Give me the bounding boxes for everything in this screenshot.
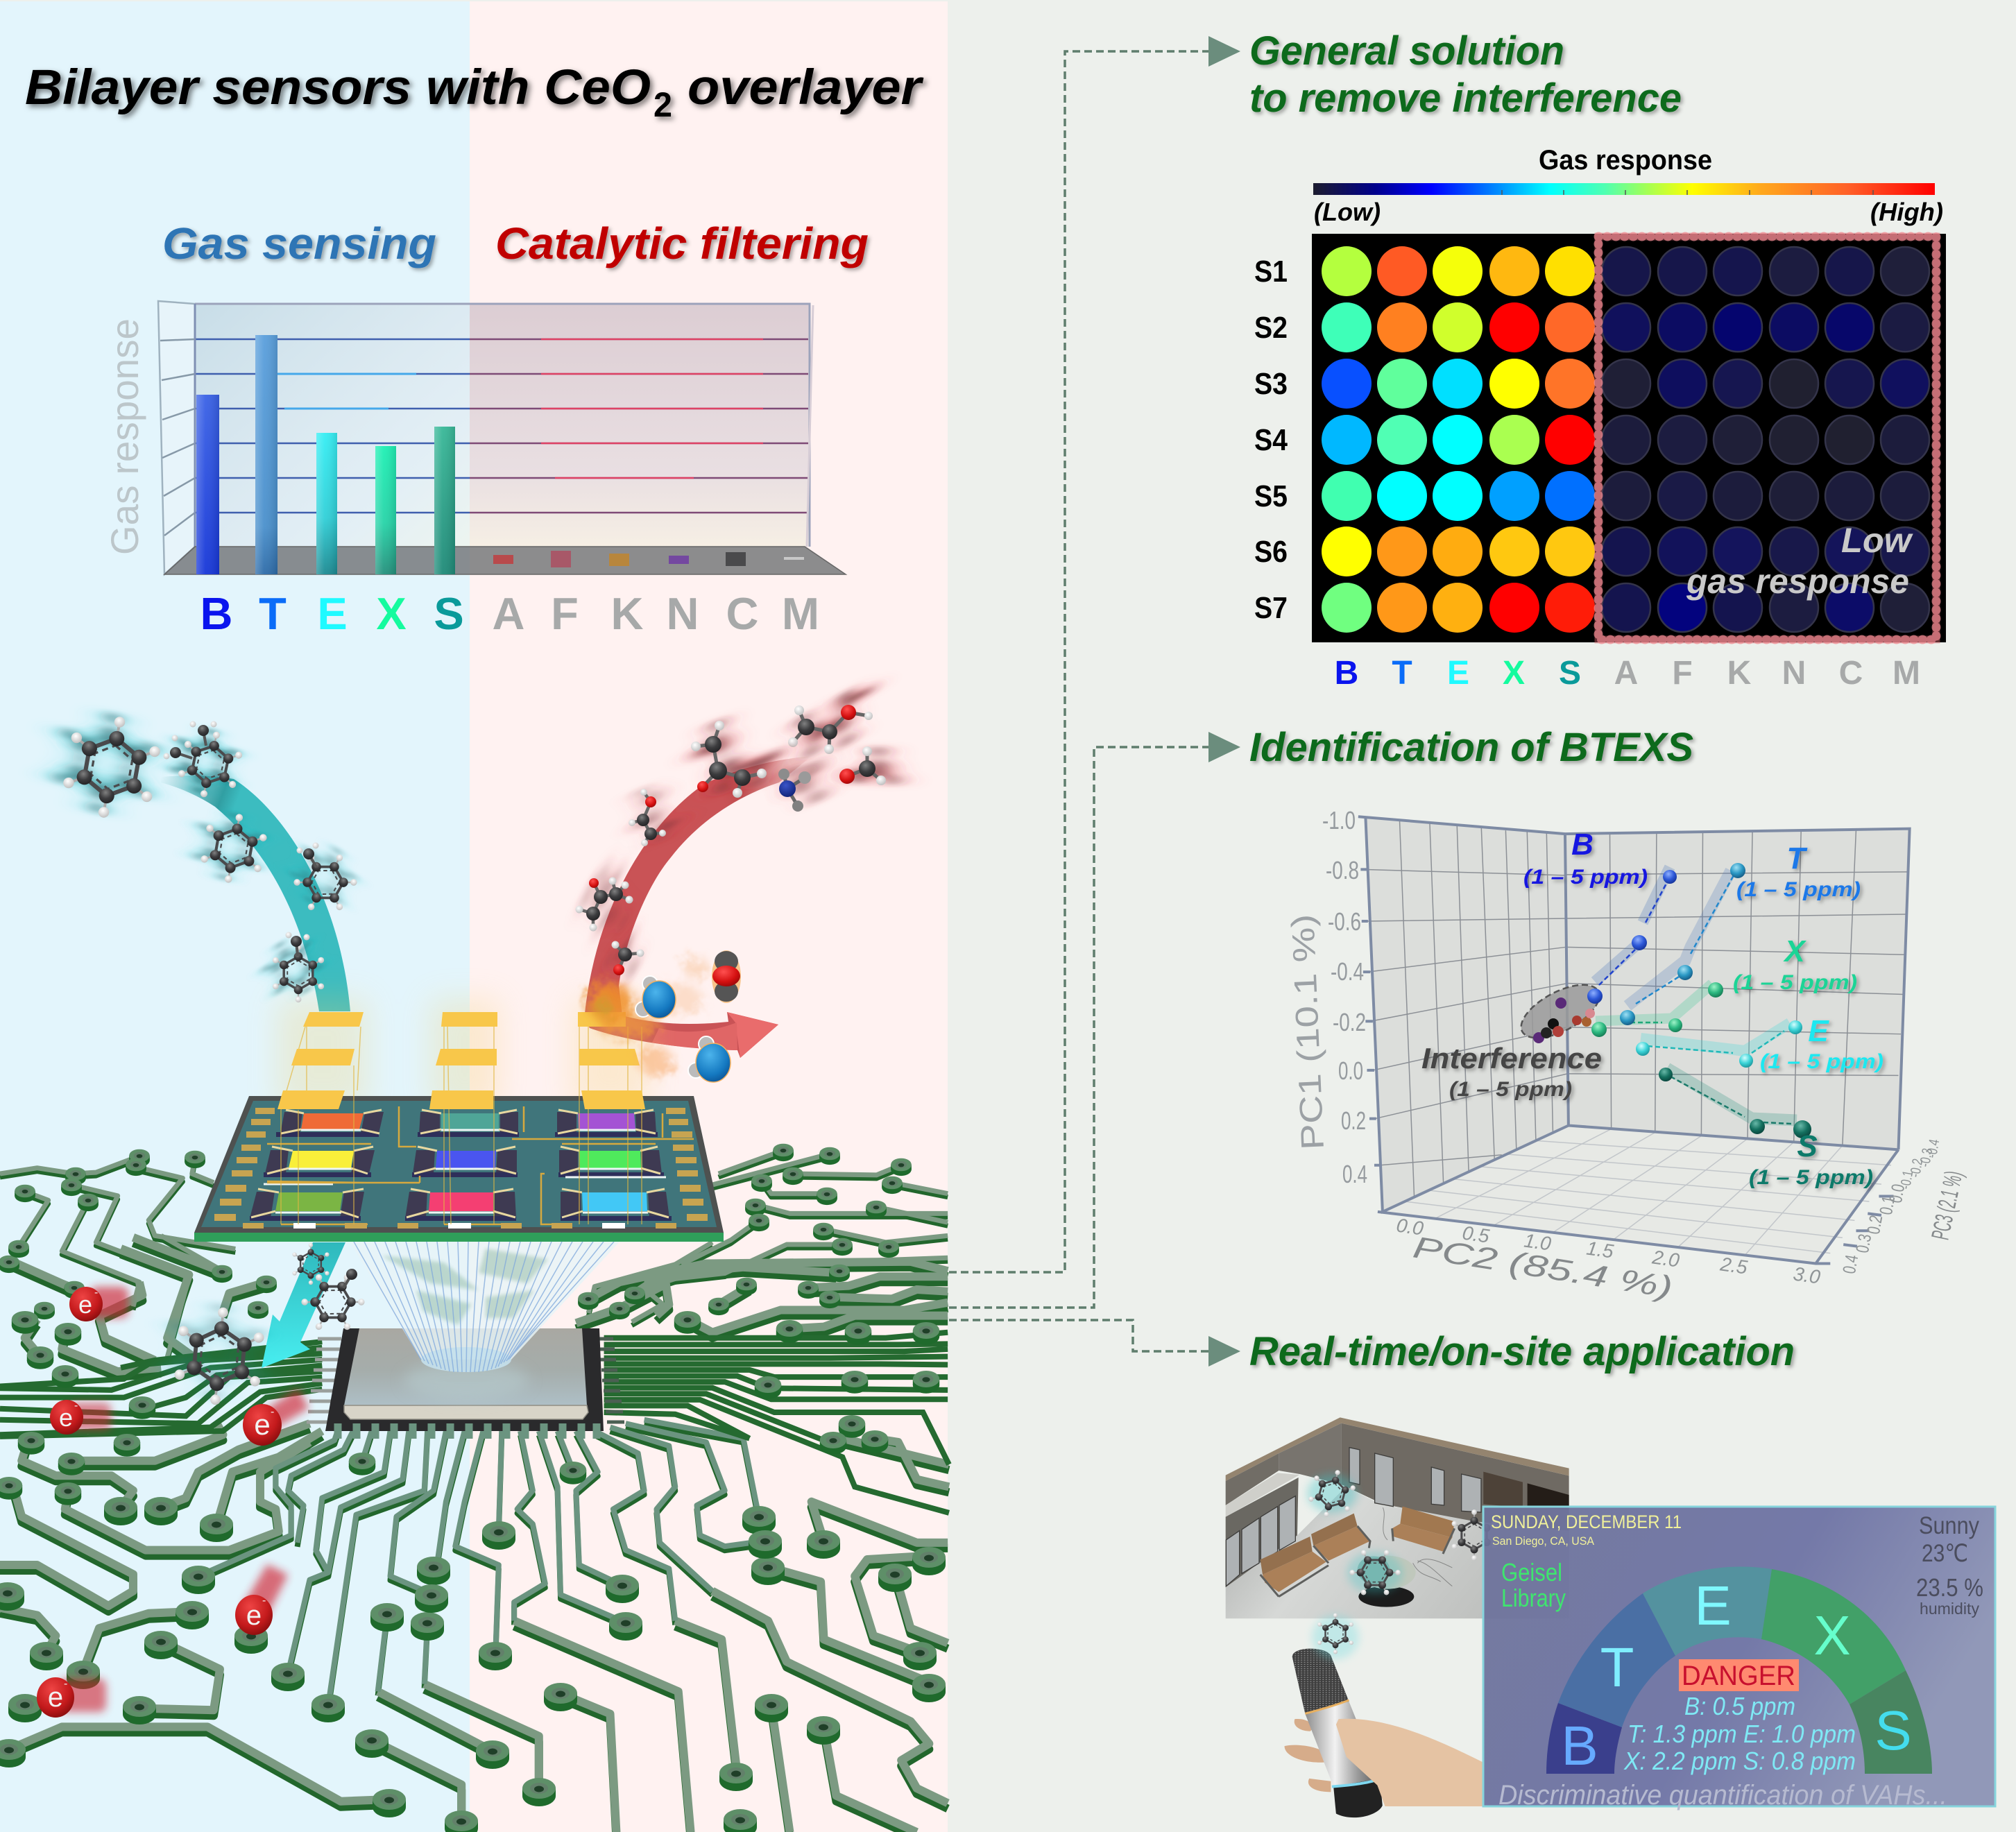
bar S bbox=[434, 427, 455, 574]
location text: Geisel bbox=[1501, 1558, 1562, 1586]
gauge letters: B bbox=[1561, 1715, 1598, 1777]
icon: benzene in room 1 bbox=[1305, 1464, 1359, 1523]
row labels: S2 bbox=[1254, 311, 1288, 345]
callout: low gas response bbox=[1686, 521, 1913, 601]
label B: B bbox=[1571, 828, 1594, 862]
label E bbox=[1760, 1014, 1883, 1073]
arrow: teal gas flow in bbox=[161, 776, 350, 1011]
legend low and high: (High) bbox=[1870, 198, 1943, 226]
label X bbox=[1733, 934, 1857, 994]
PC3 tick labels: 0.0 bbox=[1885, 1183, 1908, 1204]
legend low and high: (Low) bbox=[1314, 198, 1381, 226]
icon: water molecule 1 bbox=[635, 976, 676, 1018]
heading: gas sensing: Gas sensing bbox=[162, 219, 436, 268]
icon: electron 1: e bbox=[78, 1290, 92, 1319]
interference cluster bbox=[1513, 974, 1607, 1049]
signal buses bbox=[0, 1333, 949, 1513]
axis letters: F bbox=[551, 588, 579, 639]
plot walls and grid bbox=[1358, 816, 1910, 1264]
row labels: S6 bbox=[1254, 535, 1288, 569]
PC3 tick labels: 0.4 bbox=[1838, 1253, 1862, 1275]
label E: E bbox=[1808, 1014, 1829, 1048]
gauge letters: E bbox=[1694, 1575, 1732, 1636]
weather text: 23℃ bbox=[1922, 1540, 1968, 1567]
trajectory: T bbox=[1628, 871, 1734, 1006]
icon: molecule after sensor 1 bbox=[292, 1243, 330, 1285]
PC3 tick labels: 0.3 bbox=[1852, 1233, 1875, 1254]
trajectory: E bbox=[1641, 1023, 1790, 1053]
bar B bbox=[196, 395, 219, 574]
axis letters: A bbox=[493, 588, 524, 639]
PC2 tick labels bbox=[1395, 1215, 1822, 1288]
axis letters: C bbox=[726, 588, 758, 639]
combustion flames bbox=[587, 957, 708, 1077]
heatmap panel bbox=[1312, 234, 1946, 642]
column letters: M bbox=[1893, 655, 1920, 692]
PC2 tick labels: 1.0 bbox=[1523, 1230, 1553, 1255]
label S bbox=[1749, 1129, 1873, 1189]
smoke bbox=[1383, 1507, 1452, 1586]
heading: general solution: General solution bbox=[1249, 28, 1564, 74]
callout: low gas response: Low bbox=[1841, 521, 1913, 560]
location text bbox=[1501, 1558, 1566, 1612]
title: Bilayer sensors with CeO bbox=[25, 60, 651, 115]
label S: (1 – 5 ppm) bbox=[1749, 1166, 1873, 1189]
icon: electron 3: - bbox=[271, 1406, 274, 1418]
icon: toluene 2 bbox=[256, 930, 330, 1006]
bar X bbox=[375, 446, 396, 574]
arrow: red interfering gas flow bbox=[585, 756, 812, 1058]
icon: electron 4: - bbox=[262, 1595, 266, 1607]
label T: (1 – 5 ppm) bbox=[1736, 878, 1861, 901]
icon: small formaldehyde bbox=[604, 932, 650, 977]
title bbox=[25, 60, 924, 124]
axis letters bbox=[200, 588, 819, 639]
axis label: gas response: Gas response bbox=[103, 318, 146, 555]
icon: electron 4: e bbox=[246, 1600, 262, 1631]
column letters: A bbox=[1614, 655, 1638, 692]
sensor array chip bbox=[194, 1096, 724, 1242]
PC3 axis title: PC3 (2.1 %) bbox=[1926, 1168, 1968, 1242]
edge contact pads bbox=[214, 1108, 708, 1229]
electrons bbox=[37, 1287, 309, 1718]
sofas bbox=[1261, 1507, 1455, 1597]
column letters: T bbox=[1392, 655, 1412, 692]
icon: handheld sensor in hand bbox=[1285, 1613, 1483, 1817]
PC3 tick labels: -0.2 bbox=[1906, 1157, 1926, 1179]
chart floor bbox=[164, 547, 846, 574]
axis letters: K bbox=[611, 588, 644, 639]
room doors bbox=[1483, 1472, 1569, 1510]
room floor bbox=[1226, 1487, 1569, 1618]
PC1 axis labels bbox=[1322, 806, 1367, 1188]
date text: San Diego, CA, USA bbox=[1492, 1534, 1595, 1548]
label X: X bbox=[1782, 934, 1806, 968]
chip lid bbox=[344, 1328, 587, 1405]
row labels: S3 bbox=[1254, 367, 1288, 401]
icon: electron 2: - bbox=[74, 1400, 78, 1412]
PC2 tick labels: 0.5 bbox=[1461, 1222, 1491, 1247]
chart back wall bbox=[158, 301, 813, 574]
legend low and high bbox=[1314, 198, 1943, 226]
icon: xylene in room bbox=[1452, 1509, 1496, 1561]
icon: electron 5: e bbox=[48, 1682, 63, 1713]
weather text: 23.5 % bbox=[1916, 1573, 1983, 1602]
bar E bbox=[316, 433, 337, 574]
axis letters: T bbox=[259, 588, 287, 639]
PC2 tick labels: 2.5 bbox=[1718, 1253, 1749, 1278]
chip pins bbox=[307, 1339, 624, 1422]
icon: carbon dioxide bbox=[712, 950, 741, 1003]
processor chip bbox=[307, 1328, 624, 1439]
PC3 tick labels: 0.1 bbox=[1875, 1195, 1899, 1216]
BTEXS response dots bbox=[1322, 246, 1595, 633]
PC3 tick labels: -0.4 bbox=[1923, 1138, 1942, 1159]
icon: formaldehyde bbox=[839, 746, 897, 785]
ticker text: Discriminative quantification of VAHs... bbox=[1498, 1780, 1947, 1810]
bar T bbox=[255, 335, 277, 574]
axis letters: B bbox=[200, 588, 232, 639]
column letters: F bbox=[1672, 655, 1693, 692]
row labels: S7 bbox=[1254, 591, 1288, 625]
connector: to application bbox=[949, 1320, 1240, 1367]
icon: xylene bbox=[164, 721, 246, 803]
connector: to general solution bbox=[949, 36, 1240, 1272]
sensor membrane sides bbox=[250, 1112, 669, 1218]
heading: general solution bbox=[1249, 28, 1682, 121]
connector: to identification bbox=[949, 732, 1240, 1308]
icon: amine bbox=[778, 757, 832, 812]
concentration readings bbox=[1623, 1692, 1856, 1775]
sensor element row 2 bbox=[264, 1151, 664, 1177]
chart: heatmap bbox=[1254, 145, 1946, 692]
PC3 tick labels: -0.3 bbox=[1916, 1147, 1936, 1168]
sensor highlights and wires bbox=[251, 1106, 694, 1224]
scene: indoor room bbox=[1226, 1417, 1569, 1618]
label interference: (1 – 5 ppm) bbox=[1449, 1078, 1572, 1101]
PC1 axis labels: -0.4 bbox=[1331, 957, 1364, 986]
icon: electron 1: - bbox=[94, 1287, 98, 1299]
PC2 tick labels: 3.0 bbox=[1792, 1263, 1822, 1288]
heading: general solution: to remove interference bbox=[1249, 76, 1682, 121]
weather text: Sunny bbox=[1919, 1512, 1979, 1539]
icon: electron 5 bbox=[37, 1677, 106, 1718]
PC1 axis labels: 0.2 bbox=[1341, 1106, 1366, 1135]
column letters: X bbox=[1503, 655, 1525, 692]
column letters: N bbox=[1782, 655, 1806, 692]
danger badge: DANGER bbox=[1682, 1661, 1795, 1691]
axis letters: S bbox=[434, 588, 464, 639]
data spheres bbox=[1587, 863, 1811, 1138]
molecules: BTEXS gases bbox=[52, 705, 373, 1408]
PC3 tick labels bbox=[1838, 1138, 1942, 1275]
date text bbox=[1491, 1512, 1682, 1548]
gauge letters bbox=[1561, 1575, 1912, 1777]
trajectory: B bbox=[1595, 867, 1670, 985]
row labels: S1 bbox=[1254, 255, 1288, 289]
arrow: teal flow to processor bbox=[262, 1242, 345, 1368]
trajectory: X bbox=[1596, 984, 1712, 1022]
red dotted highlight frame bbox=[1598, 237, 1936, 640]
label E: (1 – 5 ppm) bbox=[1760, 1050, 1883, 1073]
small interference bars bbox=[493, 551, 804, 567]
icon: electron 4 bbox=[235, 1564, 288, 1635]
room walls bbox=[1226, 1417, 1569, 1587]
circuit pads bbox=[0, 1144, 946, 1832]
gauge letters: X bbox=[1813, 1604, 1851, 1666]
sensor element row 3 bbox=[250, 1192, 672, 1221]
series labels bbox=[1421, 828, 1883, 1189]
row labels bbox=[1254, 255, 1288, 625]
icon: molecule near chip bbox=[169, 1299, 266, 1408]
legend title: Gas response bbox=[1539, 145, 1712, 176]
icon: small ethanol bbox=[626, 780, 683, 848]
PC2 tick labels: 2.0 bbox=[1650, 1246, 1681, 1272]
chip bottom pins bbox=[338, 1423, 597, 1439]
label T bbox=[1736, 841, 1861, 901]
gauge letters: S bbox=[1874, 1700, 1912, 1761]
chart: 3D PCA plot bbox=[1284, 806, 1968, 1305]
weather text bbox=[1916, 1512, 1983, 1618]
PC1 axis labels: -0.8 bbox=[1326, 856, 1359, 884]
room windows bbox=[1226, 1448, 1481, 1586]
column letters: S bbox=[1559, 655, 1581, 692]
column letters: E bbox=[1447, 655, 1469, 692]
location text: Library bbox=[1501, 1584, 1566, 1612]
concentration readings: T: 1.3 ppm E: 1.0 ppm bbox=[1628, 1720, 1856, 1748]
sensor element row 1 bbox=[276, 1113, 658, 1137]
gold interconnect pads with wires bbox=[277, 1012, 645, 1224]
label B: (1 – 5 ppm) bbox=[1523, 866, 1648, 889]
PC2 tick labels: 1.5 bbox=[1585, 1238, 1615, 1262]
axis letters: E bbox=[317, 588, 348, 639]
icon: molecule after sensor 2 bbox=[293, 1260, 373, 1344]
gauge segments bbox=[1546, 1566, 1932, 1774]
icon: electron 3: e bbox=[254, 1408, 271, 1441]
PC3 tick labels: -0.1 bbox=[1897, 1169, 1916, 1190]
chart: 3D bar chart of gas response bbox=[103, 301, 846, 639]
title: overlayer bbox=[687, 60, 924, 115]
colour bar bbox=[1313, 183, 1935, 195]
icon: ethanol bbox=[788, 680, 888, 764]
icon: toluene 1 bbox=[283, 834, 366, 924]
panel: gas sensing side bbox=[0, 1, 470, 1832]
heading: catalytic filtering: Catalytic filtering bbox=[495, 219, 869, 268]
interference response dots bbox=[1602, 247, 1929, 632]
icon: electron 2 bbox=[50, 1400, 111, 1435]
icon: benzene 1 bbox=[52, 705, 165, 825]
icon: electron 2: e bbox=[59, 1403, 73, 1432]
light cone from sensor to chip bbox=[350, 1242, 620, 1372]
column letters: B bbox=[1335, 655, 1358, 692]
date text: SUNDAY, DECEMBER 11 bbox=[1491, 1512, 1682, 1532]
icon: electron 3 bbox=[243, 1389, 309, 1446]
PC1 axis labels: -0.6 bbox=[1328, 907, 1361, 936]
axis letters: N bbox=[667, 588, 699, 639]
PC2 axis title: PC2 (85.4 %) bbox=[1410, 1230, 1675, 1305]
heading: real-time application: Real-time/on-site application bbox=[1249, 1329, 1795, 1374]
column letters bbox=[1335, 655, 1920, 692]
gauge letters: T bbox=[1600, 1636, 1634, 1698]
icon: propanal bbox=[571, 862, 647, 939]
column letters: K bbox=[1727, 655, 1752, 692]
concentration readings: X: 2.2 ppm S: 0.8 ppm bbox=[1623, 1747, 1856, 1775]
circuit board traces bbox=[0, 1144, 949, 1832]
row labels: S5 bbox=[1254, 479, 1288, 513]
icon: molecule above sensor bbox=[1312, 1613, 1359, 1659]
molecules: interfering gases bbox=[571, 680, 897, 1082]
axis letters: X bbox=[376, 588, 407, 639]
icon: toluene in room bbox=[1342, 1539, 1408, 1606]
gold pad glow bbox=[277, 999, 649, 1110]
column letters: C bbox=[1839, 655, 1863, 692]
coffee table bbox=[1358, 1556, 1416, 1607]
trajectory: S bbox=[1667, 1068, 1797, 1124]
PC1 axis labels: 0.4 bbox=[1342, 1160, 1367, 1188]
callout: low gas response: gas response bbox=[1686, 562, 1909, 601]
icon: electron 1 bbox=[69, 1287, 128, 1321]
label interference: Interference bbox=[1421, 1042, 1602, 1075]
PC1 axis labels: 0.0 bbox=[1338, 1056, 1363, 1085]
label X: (1 – 5 ppm) bbox=[1733, 971, 1857, 994]
icon: electron 5: - bbox=[64, 1678, 67, 1690]
title: 2 bbox=[654, 85, 672, 124]
PC3 tick labels: 0.2 bbox=[1863, 1214, 1886, 1235]
label T: T bbox=[1787, 841, 1808, 875]
PC1 axis title: PC1 (10.1 %) bbox=[1284, 914, 1331, 1151]
row labels: S4 bbox=[1254, 423, 1288, 457]
axis letters: M bbox=[782, 588, 819, 639]
icon: acetone bbox=[689, 704, 786, 803]
panel: catalytic filtering side bbox=[470, 1, 948, 1832]
heading: identification of BTEXS: Identification of BTEXS bbox=[1249, 725, 1693, 770]
PC1 axis labels: -0.2 bbox=[1333, 1008, 1366, 1036]
icon: water molecule 2 bbox=[688, 1036, 731, 1082]
panel: dashboard display bbox=[1483, 1507, 1995, 1810]
PC1 axis labels: -1.0 bbox=[1322, 806, 1356, 834]
label interference bbox=[1421, 1042, 1602, 1101]
weather text: humidity bbox=[1920, 1600, 1979, 1618]
icon: benzene 2 bbox=[193, 807, 270, 888]
concentration readings: B: 0.5 ppm bbox=[1684, 1692, 1795, 1720]
label S: S bbox=[1797, 1129, 1818, 1163]
label B bbox=[1523, 828, 1648, 889]
PC2 tick labels: 0.0 bbox=[1395, 1215, 1425, 1240]
